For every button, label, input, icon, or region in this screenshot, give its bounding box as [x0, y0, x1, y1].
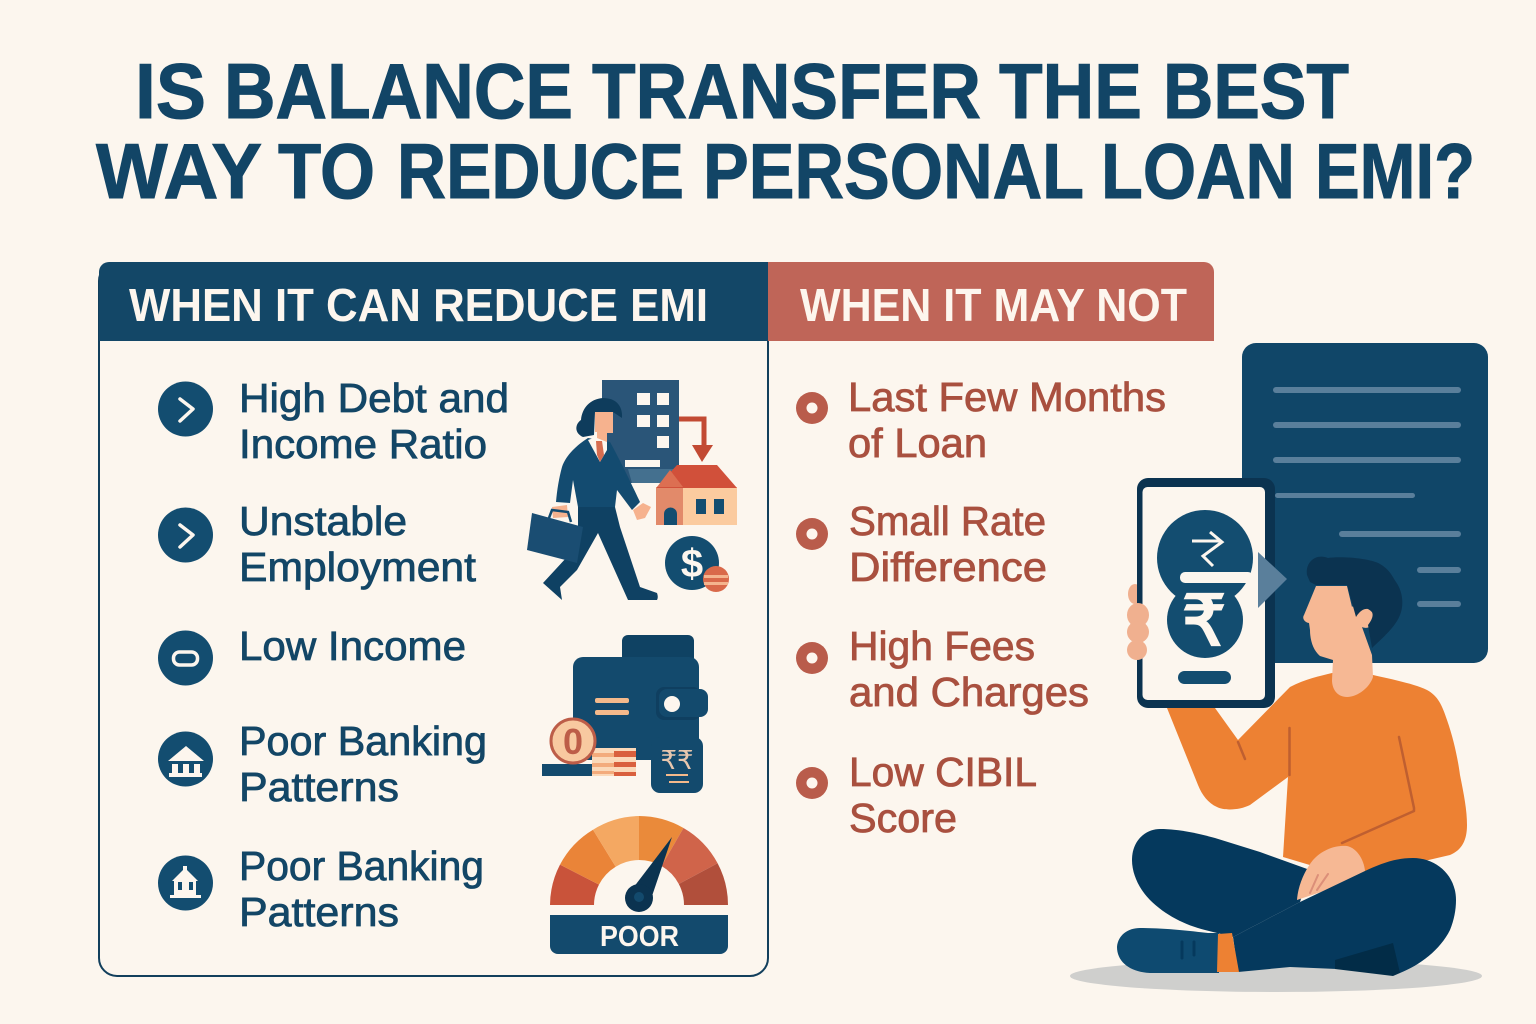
- figure: shirt: [1167, 673, 1467, 880]
- gauge label: poor: POOR: [600, 921, 679, 953]
- item: unstable employment: Unstable: [239, 498, 407, 544]
- icon: dollar coin: $: [681, 542, 703, 586]
- panel: when it may not: [768, 262, 1214, 841]
- title: LOAN: [1101, 127, 1295, 215]
- item: high debt and income ratio: High Debt and: [239, 375, 509, 421]
- heading: when it may not: WHEN IT MAY NOT: [800, 279, 1187, 331]
- figure: left leg: [1132, 829, 1310, 937]
- title: TRANSFER: [592, 47, 981, 135]
- icon: phone with rupee transfer: ₹: [1182, 582, 1226, 660]
- title: [96, 47, 1475, 215]
- title: EMI?: [1315, 127, 1475, 215]
- figure: hand on knee: [1297, 846, 1365, 900]
- item: high debt and income ratio: [158, 375, 509, 467]
- icon: rupee card: [651, 737, 703, 793]
- heading: when it can reduce EMI: [99, 262, 768, 341]
- heading: when it can reduce EMI: WHEN IT CAN REDUCE EMI: [129, 279, 708, 331]
- item: low cibil score: Low CIBIL: [849, 749, 1037, 795]
- item: small rate difference: [796, 498, 1047, 590]
- item: last few months of loan: Last Few Months: [848, 374, 1166, 420]
- title: REDUCE: [397, 127, 684, 215]
- icon: office building: [602, 380, 679, 483]
- icon: house: [656, 465, 737, 525]
- item: low income: [158, 623, 466, 686]
- title: BEST: [1163, 47, 1349, 135]
- heading: when it may not: [768, 262, 1214, 341]
- figure: right leg: [1233, 858, 1456, 973]
- title: THE: [999, 47, 1142, 135]
- title: IS: [135, 47, 206, 135]
- icon: businessman walking from building to house: [527, 380, 737, 600]
- gauge label: poor: [550, 915, 728, 954]
- item: last few months of loan: [796, 374, 1166, 466]
- gauge: poor credit score: [550, 816, 728, 954]
- arrow: building to house: [679, 419, 713, 462]
- item: low cibil score: Score: [849, 795, 957, 841]
- item: high fees and charges: [796, 623, 1089, 715]
- item: unstable employment: [158, 498, 477, 590]
- item: unstable employment: Employment: [239, 544, 477, 590]
- arrow: transfer: [1258, 552, 1287, 608]
- icon: rupee card: ₹₹: [660, 745, 694, 775]
- icon: phone with rupee transfer: [1127, 478, 1287, 708]
- item: poor banking patterns, second: [158, 843, 484, 935]
- icon: wallet with coin and rupee card: [542, 635, 708, 793]
- item: poor banking patterns, second: Patterns: [239, 889, 399, 935]
- item: high debt and income ratio: Income Ratio: [239, 421, 487, 467]
- icon: zero coin: 0: [563, 721, 583, 762]
- item: low cibil score: [796, 749, 1037, 841]
- figure: left shoe: [1117, 928, 1239, 973]
- panel: when it can reduce EMI: [99, 262, 768, 976]
- figure: right shoe: [1335, 943, 1400, 976]
- item: last few months of loan: of Loan: [848, 420, 987, 466]
- title: BALANCE: [224, 47, 573, 135]
- item: high fees and charges: and Charges: [849, 669, 1089, 715]
- item: high fees and charges: High Fees: [849, 623, 1035, 669]
- item: low income: Low Income: [239, 623, 466, 669]
- fingers: [1127, 603, 1149, 660]
- item: poor banking patterns: Poor Banking: [239, 718, 487, 764]
- icon: zero coin: [551, 719, 595, 763]
- title: PERSONAL: [703, 127, 1084, 215]
- item: poor banking patterns: [158, 718, 487, 810]
- illustration: person sitting with phone: [1070, 478, 1482, 992]
- title: TO: [278, 127, 375, 215]
- item: poor banking patterns: Patterns: [239, 764, 399, 810]
- illustration: document panel: [1242, 343, 1488, 663]
- item: small rate difference: Difference: [849, 544, 1047, 590]
- shirt folds: [1238, 728, 1414, 843]
- gauge needle: [625, 837, 672, 912]
- icon: dollar coin: [665, 536, 729, 592]
- floor shadow: [1070, 960, 1482, 992]
- figure: neck and head: [1303, 557, 1402, 697]
- item: poor banking patterns, second: Poor Banking: [239, 843, 484, 889]
- title: WAY: [96, 127, 262, 215]
- item: small rate difference: Small Rate: [849, 498, 1046, 544]
- figure: businessman: [527, 398, 658, 600]
